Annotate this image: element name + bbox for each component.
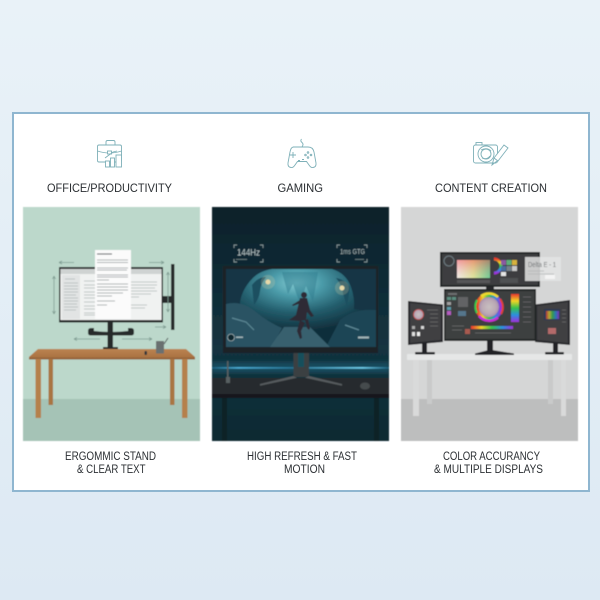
icon: game controller bbox=[288, 139, 316, 168]
144Hz badge bbox=[234, 245, 263, 262]
caption: content creation: & MULTIPLE DISPLAYS bbox=[434, 464, 543, 476]
caption: gaming bbox=[247, 451, 357, 476]
floor bbox=[401, 399, 578, 441]
document sheet bbox=[95, 250, 131, 319]
wall bbox=[401, 207, 578, 399]
144Hz badge: 144Hz bbox=[237, 248, 260, 258]
hero figure bbox=[289, 292, 314, 339]
wall bbox=[23, 207, 200, 399]
mouse bbox=[360, 382, 370, 390]
desk bbox=[29, 349, 195, 418]
caption: office: & CLEAR TEXT bbox=[77, 464, 146, 476]
caption: content creation bbox=[434, 451, 543, 476]
1ms GTG badge: 1ms GTG bbox=[340, 249, 365, 256]
monitor stand bbox=[85, 322, 137, 354]
icon: briefcase with chart bbox=[98, 140, 122, 167]
Delta E card bbox=[525, 257, 561, 281]
floor bbox=[23, 399, 200, 441]
panel: office illustration bbox=[23, 207, 200, 441]
1ms GTG badge bbox=[337, 245, 367, 262]
left monitor stand bbox=[415, 343, 435, 354]
main card bbox=[13, 113, 589, 491]
side monitor on arm bbox=[163, 264, 174, 330]
caption: gaming: MOTION bbox=[284, 464, 325, 476]
center monitor stand bbox=[475, 341, 514, 355]
glow strip bbox=[212, 362, 389, 373]
gaming desk bbox=[212, 378, 389, 441]
top monitor neck bbox=[486, 287, 494, 290]
heading: gaming: GAMING bbox=[278, 181, 323, 195]
desk bbox=[407, 354, 572, 416]
panel: content illustration bbox=[401, 207, 578, 441]
heading: office: OFFICE/PRODUCTIVITY bbox=[47, 181, 172, 195]
column: gaming bbox=[212, 139, 389, 476]
column: office bbox=[23, 140, 200, 476]
HUD right bbox=[358, 336, 369, 338]
color wheel bbox=[475, 293, 503, 321]
caption: office: ERGOMMIC STAND bbox=[65, 451, 156, 463]
gaming monitor bbox=[223, 266, 378, 353]
panel: gaming illustration bbox=[212, 207, 389, 441]
headset stand bbox=[226, 361, 230, 383]
HUD left bbox=[228, 334, 243, 341]
column: content creation bbox=[401, 142, 578, 476]
left monitor bbox=[408, 301, 443, 345]
pen cup bbox=[144, 338, 168, 355]
adjustment arrows bbox=[52, 261, 170, 340]
caption: gaming: HIGH REFRESH & FAST bbox=[247, 451, 357, 463]
front monitor bbox=[59, 267, 163, 322]
caption: content creation: COLOR ACCURANCY bbox=[443, 451, 540, 463]
heading: content creation: CONTENT CREATION bbox=[435, 181, 547, 195]
top monitor bbox=[440, 252, 540, 287]
caption: office bbox=[65, 451, 156, 476]
cave scene bbox=[226, 269, 376, 347]
right monitor stand bbox=[545, 343, 564, 354]
room background bbox=[212, 207, 389, 441]
right monitor bbox=[535, 300, 570, 345]
icon: camera and brush bbox=[474, 142, 508, 165]
center monitor bbox=[444, 289, 536, 341]
monitor stand bbox=[260, 353, 342, 386]
Delta E card: Delta E - 1 bbox=[528, 262, 556, 269]
